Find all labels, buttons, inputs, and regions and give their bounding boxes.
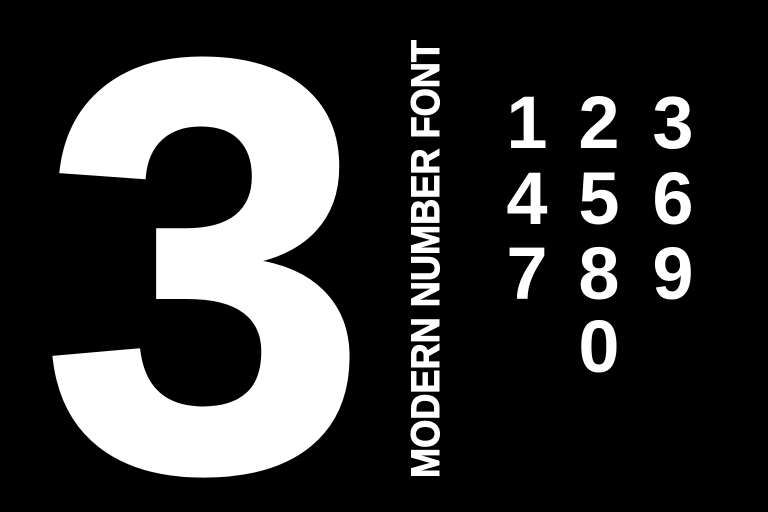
digit grid: 9 bbox=[652, 232, 694, 315]
digit grid: 4 bbox=[506, 157, 548, 240]
digit grid: 5 bbox=[578, 157, 620, 240]
digit grid: 0 bbox=[578, 305, 620, 388]
digit grid: 7 bbox=[506, 232, 548, 315]
digit grid: 3 bbox=[652, 81, 694, 164]
digit grid: 6 bbox=[652, 157, 694, 240]
digit grid: 2 bbox=[578, 81, 620, 164]
digit grid bbox=[508, 96, 691, 372]
vertical title: modern number font: MODERN NUMBER FONT bbox=[404, 40, 448, 478]
digit grid: 8 bbox=[578, 232, 620, 315]
digit grid: 1 bbox=[506, 81, 548, 164]
